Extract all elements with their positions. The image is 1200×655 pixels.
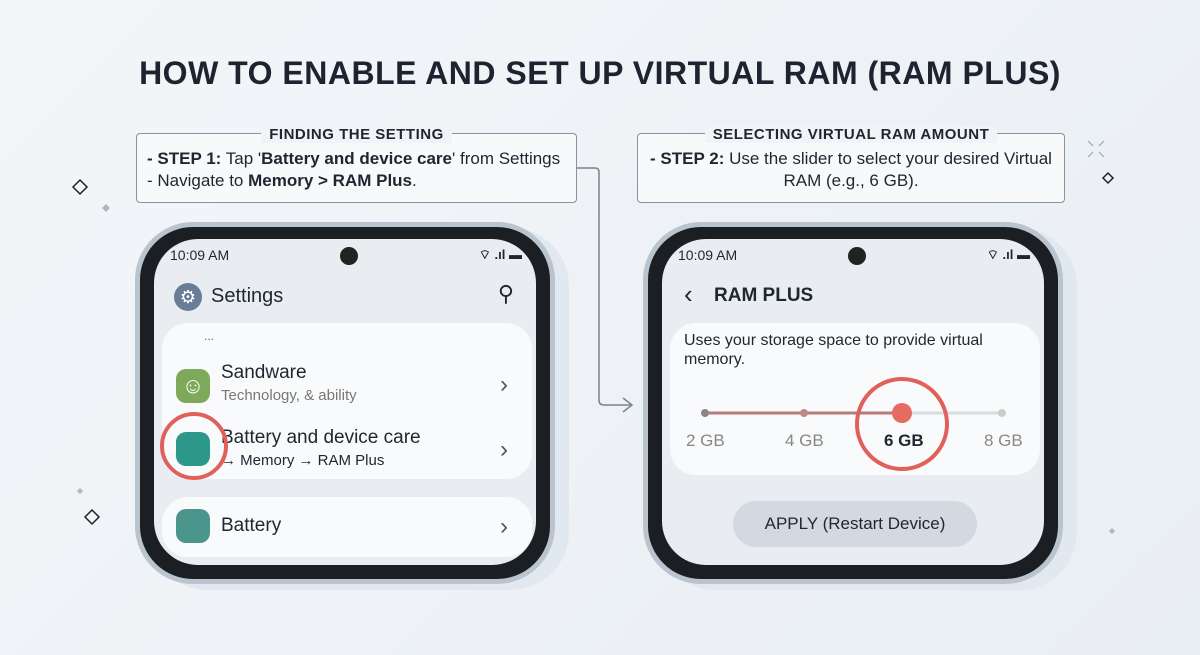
apply button [733,501,977,547]
phone 2: RAM plus: 2 GB [686,431,725,450]
phone 1: settings: ⚲ [498,281,514,306]
settings header [174,283,202,311]
phone 1: settings: › [500,436,508,463]
highlight circle [160,412,228,480]
callout: step 2 [637,133,1065,203]
phone 1: settings: Battery and device care [221,427,421,448]
phone 1: settings: › [500,371,508,398]
phone 1: settings: ... [204,329,214,343]
callout: step 1: - Navigate to Memory > RAM Plus. [147,171,417,190]
phone 2: RAM plus: 10:09 AM [678,247,737,263]
phone 2: RAM plus: 8 GB [984,431,1023,450]
phone 1: settings: 10:09 AM [170,247,229,263]
phone 1: settings: Sandware [221,362,307,383]
phone 1: settings: → Memory → RAM Plus [221,452,384,469]
phone 2: RAM plus: ‹ [684,279,693,309]
card: settings list [162,323,532,479]
phone 1: settings: ⌔ .ıl ▬ [479,247,522,262]
phone 1: settings: ☺ [182,373,204,398]
phone 2: RAM plus [643,222,1063,584]
arrow: connector [577,167,633,412]
apply button: APPLY (Restart Device) [765,514,945,533]
phone 2: RAM plus: 4 GB [785,431,824,450]
card: battery [162,497,532,557]
phone 1: settings: Battery [221,515,281,536]
phone 2: RAM plus: 6 GB [884,431,924,450]
callout: step 1: FINDING THE SETTING [269,126,444,143]
callout: step 1 [136,133,577,203]
settings header: ⚙ [180,287,196,307]
card: slider [670,323,1040,475]
phone 2: RAM plus: RAM PLUS [714,285,813,306]
phone 1: settings: Settings [211,285,283,307]
phone 2: RAM plus: ⌔ .ıl ▬ [987,247,1030,262]
callout: step 1: - STEP 1: Tap 'Battery and device care' from Settings [147,149,560,168]
callout: step 2: SELECTING VIRTUAL RAM AMOUNT [713,126,989,143]
phone 1: settings: › [500,513,508,540]
highlight circle [855,377,949,471]
title: HOW TO ENABLE AND SET UP VIRTUAL RAM (RAM PLUS) [139,55,1061,91]
callout: step 2: - STEP 2: Use the slider to select your desired Virtual RAM (e.g., 6 GB). [650,149,1052,190]
phone 2: RAM plus: Uses your storage space to provide virtual memory. [684,332,983,368]
phone 1: settings: Technology, & ability [221,387,357,404]
phone 1: settings [135,222,555,584]
